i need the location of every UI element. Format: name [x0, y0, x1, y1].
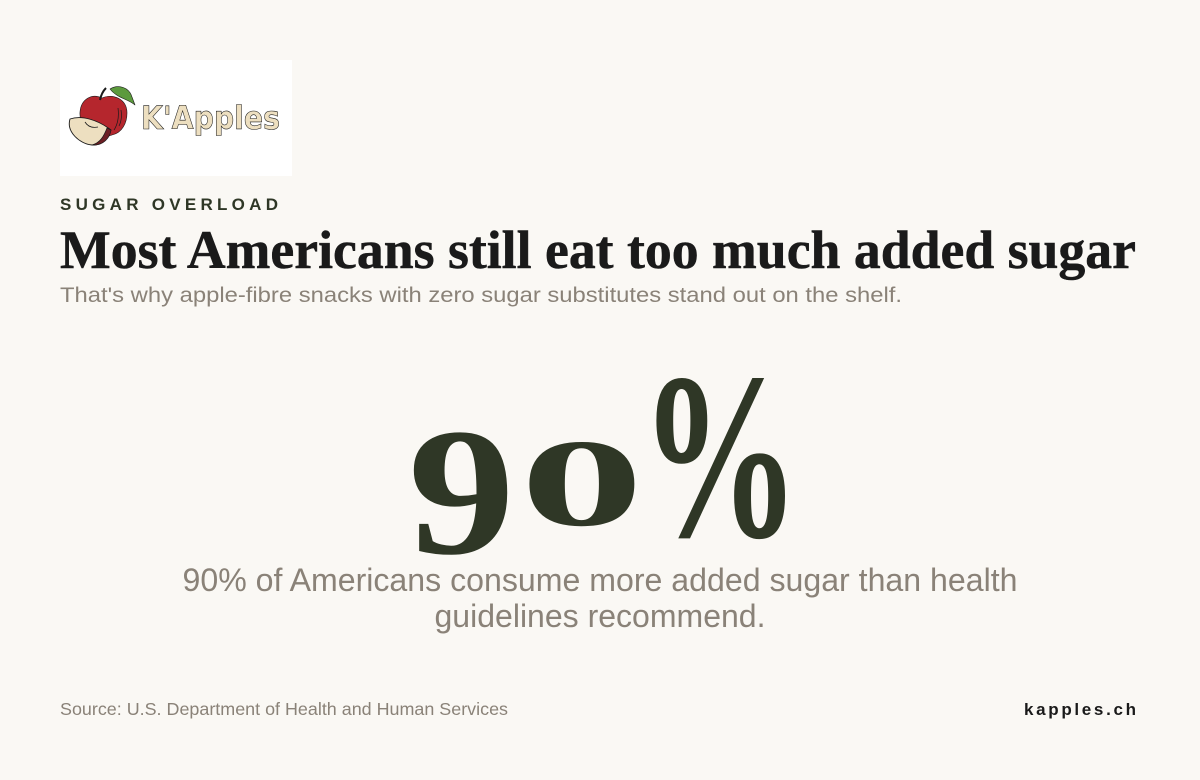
title: Most Americans still eat too much added sugar	[60, 220, 1136, 280]
subtitle: That's why apple-fibre snacks with zero sugar substitutes stand out on the shelf.	[60, 284, 902, 307]
big stat: 90%: 0	[520, 414, 644, 552]
website: kapples.ch	[1024, 700, 1136, 719]
logo: K'Apples	[60, 60, 292, 176]
eyebrow: sugar overload: SUGAR OVERLOAD	[60, 195, 278, 214]
big stat: 90%	[408, 325, 800, 592]
big stat: 90%: %	[640, 325, 800, 588]
logo wordmark: K'Apples	[141, 99, 280, 137]
big stat: 90%: 9	[408, 391, 515, 592]
source: Source: U.S. Department of Health and Human Services	[60, 699, 508, 719]
stat description: 90% of Americans consume more added sugar than health	[182, 562, 1018, 598]
stat description	[182, 562, 1018, 634]
stat description: guidelines recommend.	[434, 598, 766, 634]
icon: apple	[69, 87, 135, 145]
